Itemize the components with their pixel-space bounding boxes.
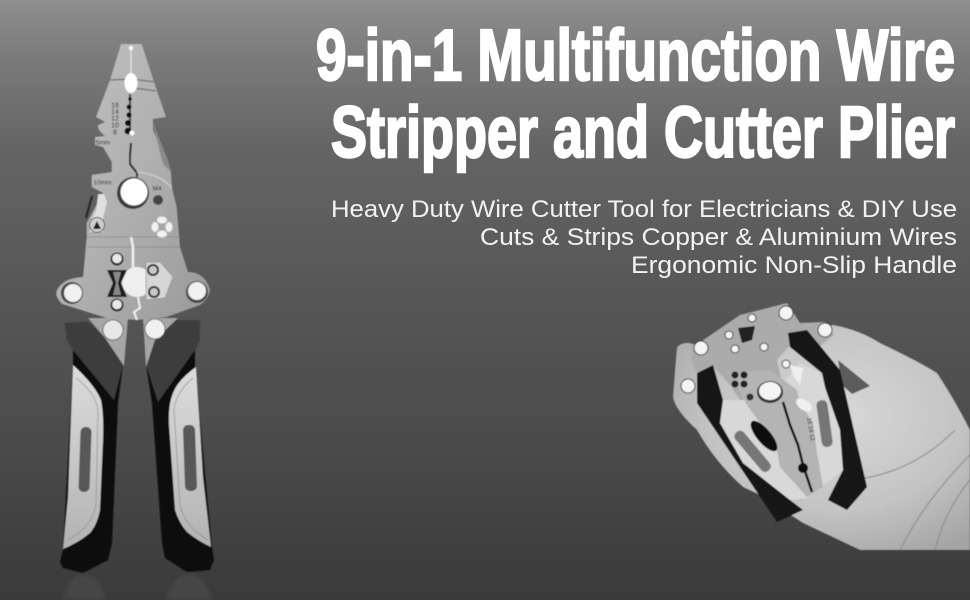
10mm label: 10mm bbox=[93, 180, 112, 186]
pivot bolt bbox=[117, 177, 149, 209]
left handle slot bbox=[78, 427, 92, 492]
crimp circle bbox=[122, 267, 152, 297]
left side bolt bbox=[61, 282, 83, 304]
icon: hand holding plier bbox=[673, 303, 970, 550]
plier head bbox=[56, 44, 210, 320]
white wire slot bbox=[794, 396, 814, 414]
right side bolt bbox=[186, 281, 208, 303]
gauge numbers: 8 bbox=[113, 130, 117, 136]
tool plate bbox=[691, 303, 834, 430]
right handle in hand bbox=[788, 330, 867, 510]
head details bbox=[61, 46, 208, 320]
gauge numbers: 10 bbox=[111, 122, 119, 130]
5mm label: 5mm bbox=[96, 140, 110, 146]
clover hole bbox=[732, 372, 748, 388]
left handle in hand bbox=[697, 365, 803, 522]
hourglass die bbox=[107, 252, 127, 312]
dark cutout bbox=[746, 417, 782, 455]
M4 hole bbox=[153, 195, 163, 205]
gauge numbers: 14 bbox=[111, 109, 119, 116]
left handle bbox=[60, 322, 123, 573]
centre notch bbox=[738, 326, 755, 343]
left rivet bbox=[103, 320, 123, 340]
subtitle text block: Ergonomic Non-Slip Handle bbox=[631, 252, 957, 279]
plier reflection bbox=[63, 574, 212, 600]
hand creases bbox=[850, 430, 970, 550]
right handle bbox=[146, 320, 214, 572]
jaw in hand bbox=[730, 370, 823, 497]
upper bolts bbox=[681, 306, 832, 393]
gauge numbers bbox=[111, 102, 119, 136]
centre wire hole bbox=[124, 73, 138, 93]
M4 label: M4 bbox=[152, 186, 162, 192]
left grip slot bbox=[732, 429, 773, 474]
four leaf hole bbox=[152, 216, 172, 238]
M4 hole in hand bbox=[746, 394, 754, 400]
stripping notches bbox=[125, 94, 132, 134]
subtitle text block: Cuts & Strips Copper & Aluminium Wires bbox=[480, 224, 957, 251]
tool in hand bbox=[681, 303, 867, 522]
grip insert bbox=[720, 363, 843, 500]
hand bbox=[673, 325, 970, 550]
tip hole bbox=[798, 463, 808, 473]
subtitle text block: Heavy Duty Wire Cutter Tool for Electricians & DIY Use bbox=[331, 196, 957, 223]
icon: wire stripper plier bbox=[56, 44, 214, 600]
notch markings: 16 14 12 bbox=[805, 417, 815, 442]
crimp plate bbox=[146, 262, 173, 300]
right grip slot bbox=[816, 400, 833, 448]
title bbox=[316, 16, 955, 173]
head pivot bolt bbox=[757, 381, 783, 403]
subtitle text block bbox=[331, 196, 957, 279]
lower split line bbox=[131, 237, 133, 268]
right handle slot bbox=[183, 425, 197, 491]
lever bbox=[790, 365, 803, 385]
web of thumb shadow bbox=[838, 360, 870, 394]
right rivet bbox=[145, 319, 165, 339]
gauge numbers: 16 bbox=[111, 102, 119, 110]
crimp lever bbox=[86, 194, 107, 232]
gauge numbers: 12 bbox=[111, 116, 119, 122]
lower plates and teeth bbox=[88, 318, 178, 367]
jaw slit bbox=[783, 402, 812, 492]
